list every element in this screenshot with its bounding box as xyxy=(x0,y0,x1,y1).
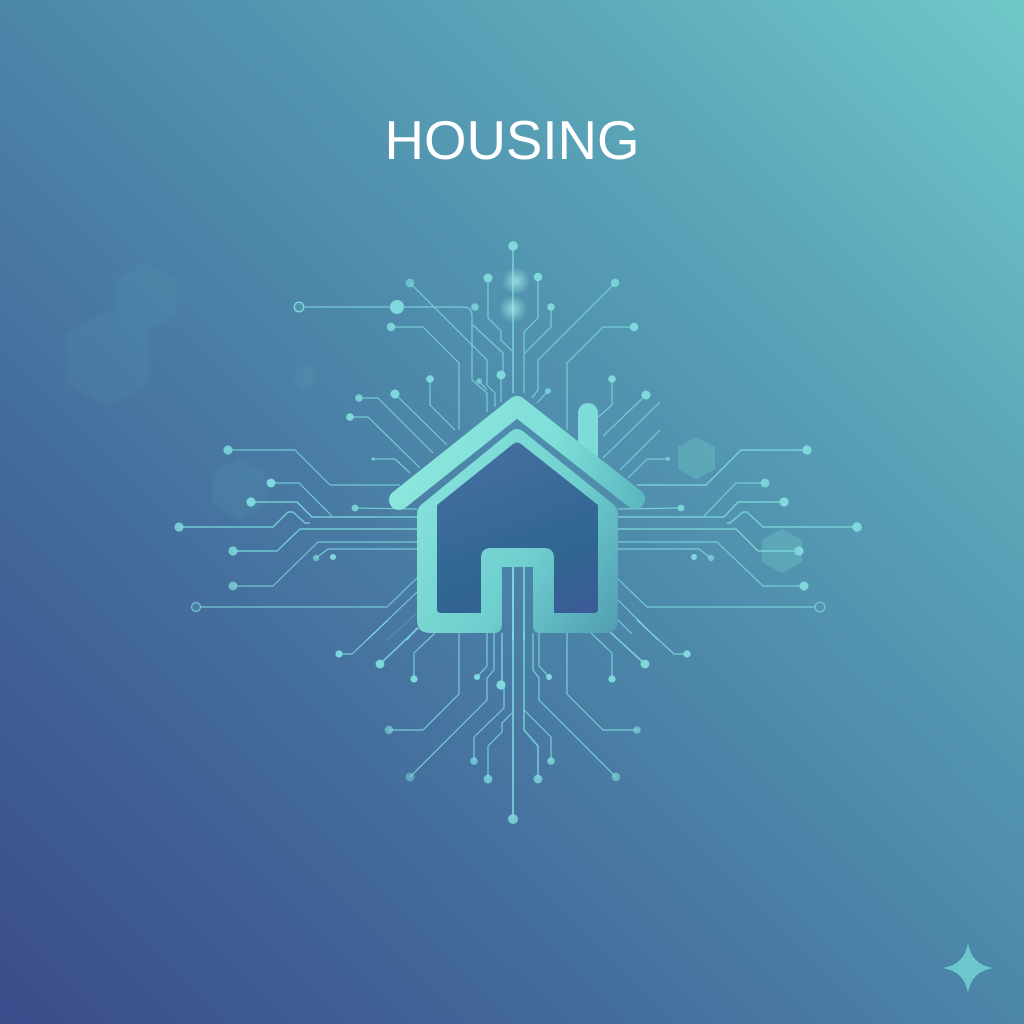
door traces xyxy=(513,567,524,640)
house body xyxy=(417,429,618,633)
title: HOUSING xyxy=(384,109,640,171)
icon: house xyxy=(399,403,635,633)
circuit nodes: bottom xyxy=(335,650,691,824)
circuit nodes: top xyxy=(294,241,670,461)
house roof xyxy=(399,406,635,500)
circuit traces: right xyxy=(618,450,857,640)
icon: four-point star xyxy=(943,943,993,993)
circuit nodes: right xyxy=(678,445,862,612)
circuit nodes: left xyxy=(174,445,358,612)
decorative hexagons xyxy=(66,262,802,573)
circuit traces: bottom xyxy=(339,620,687,819)
circuit traces: top xyxy=(304,246,668,478)
house interior xyxy=(437,442,598,613)
glow nodes xyxy=(499,267,530,323)
circuit traces: left xyxy=(179,450,417,640)
house chimney xyxy=(578,403,598,468)
